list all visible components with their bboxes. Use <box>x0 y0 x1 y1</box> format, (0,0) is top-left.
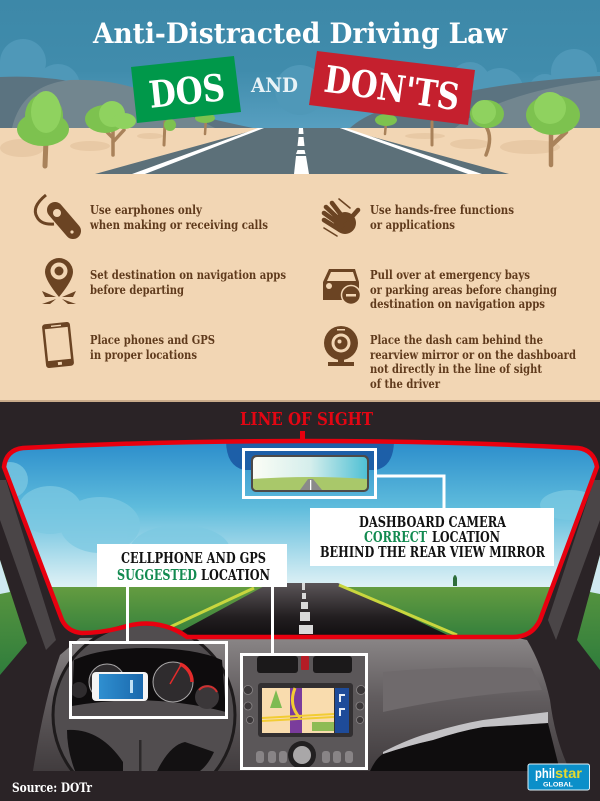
phone in cluster <box>92 672 148 701</box>
tip: phones and GPS: in proper locations <box>90 347 197 362</box>
tip: earphones: when making or receiving calls <box>89 217 268 232</box>
tip: dash cam: not directly in the line of sight <box>370 361 542 376</box>
panel: tips background <box>0 174 600 401</box>
gauges <box>153 662 193 702</box>
logo: philstar global: phil <box>535 765 555 781</box>
callout: dashboard camera: DASHBOARD CAMERA <box>359 514 507 531</box>
trees left <box>17 91 215 166</box>
logo: philstar global: star <box>555 765 583 781</box>
sign: DON'TS: DON'TS <box>322 57 462 119</box>
callout: cluster highlight box <box>70 642 226 718</box>
source: Source: DOTr <box>12 781 92 796</box>
sign: DOS <box>131 56 241 123</box>
tip: dash cam: Place the dash cam behind the <box>370 332 543 347</box>
tip: dash cam <box>370 332 576 391</box>
tip: phones and GPS: Place phones and GPS <box>90 332 215 347</box>
tip: navigation: before departing <box>90 282 184 297</box>
callout: cellphone and GPS: CELLPHONE AND GPS <box>121 550 266 567</box>
dashboard <box>33 637 570 771</box>
panel: car interior <box>0 400 600 801</box>
side windows <box>0 560 27 675</box>
connector: label to console <box>271 587 274 653</box>
tip: earphones <box>89 202 268 232</box>
heading: line of sight: LINE OF SIGHT <box>240 409 374 430</box>
tip: navigation <box>90 267 286 297</box>
icon: map pin <box>42 258 76 304</box>
tip: pull over <box>370 267 557 311</box>
tip: hands-free <box>370 202 514 232</box>
line of sight outline <box>4 431 597 637</box>
panel: header road scene <box>0 0 600 202</box>
rearview mirror <box>251 455 369 492</box>
logo: philstar global: GLOBAL <box>543 782 573 788</box>
callout: console highlight box <box>242 654 366 768</box>
tip: dash cam: of the driver <box>370 376 440 391</box>
callout: cellphone and GPS: LOCATION <box>201 567 270 584</box>
road <box>95 128 509 174</box>
connector: mirror to label <box>377 476 444 508</box>
logo: philstar global <box>528 764 590 790</box>
windshield view <box>0 440 600 642</box>
tip: navigation: Set destination on navigation apps <box>90 267 286 282</box>
title: Anti-Distracted Driving Law <box>92 17 508 50</box>
tip: earphones: Use earphones only <box>90 202 203 217</box>
tip: pull over: or parking areas before changing <box>370 282 557 297</box>
icon: earpiece <box>35 195 74 234</box>
callout: dashboard camera <box>310 508 554 566</box>
callout: mirror highlight box <box>244 450 376 498</box>
sign: DOS: DOS <box>147 65 227 117</box>
center console with navigation <box>241 653 367 769</box>
icon: dash cam <box>324 326 358 366</box>
connector: label to cluster <box>126 587 129 641</box>
tip: hands-free: Use hands-free functions <box>370 202 514 217</box>
tip: hands-free: or applications <box>370 217 455 232</box>
icon: car with minus sign <box>323 269 360 304</box>
callout: cellphone and GPS <box>97 544 287 587</box>
callout: dashboard camera: CORRECT <box>364 529 427 546</box>
trees right <box>375 92 580 165</box>
callout: cellphone and GPS: SUGGESTED <box>117 567 197 584</box>
tip: pull over: Pull over at emergency bays <box>370 267 530 282</box>
text: AND: AND <box>250 73 298 97</box>
steering wheel and cluster <box>52 624 236 771</box>
pillars <box>0 480 56 650</box>
icon: phone <box>42 322 74 368</box>
callout: dashboard camera: LOCATION <box>432 529 500 546</box>
icon: waving hand <box>324 199 358 236</box>
tip: phones and GPS <box>90 332 215 362</box>
tip: pull over: destination on navigation apps <box>370 296 545 311</box>
